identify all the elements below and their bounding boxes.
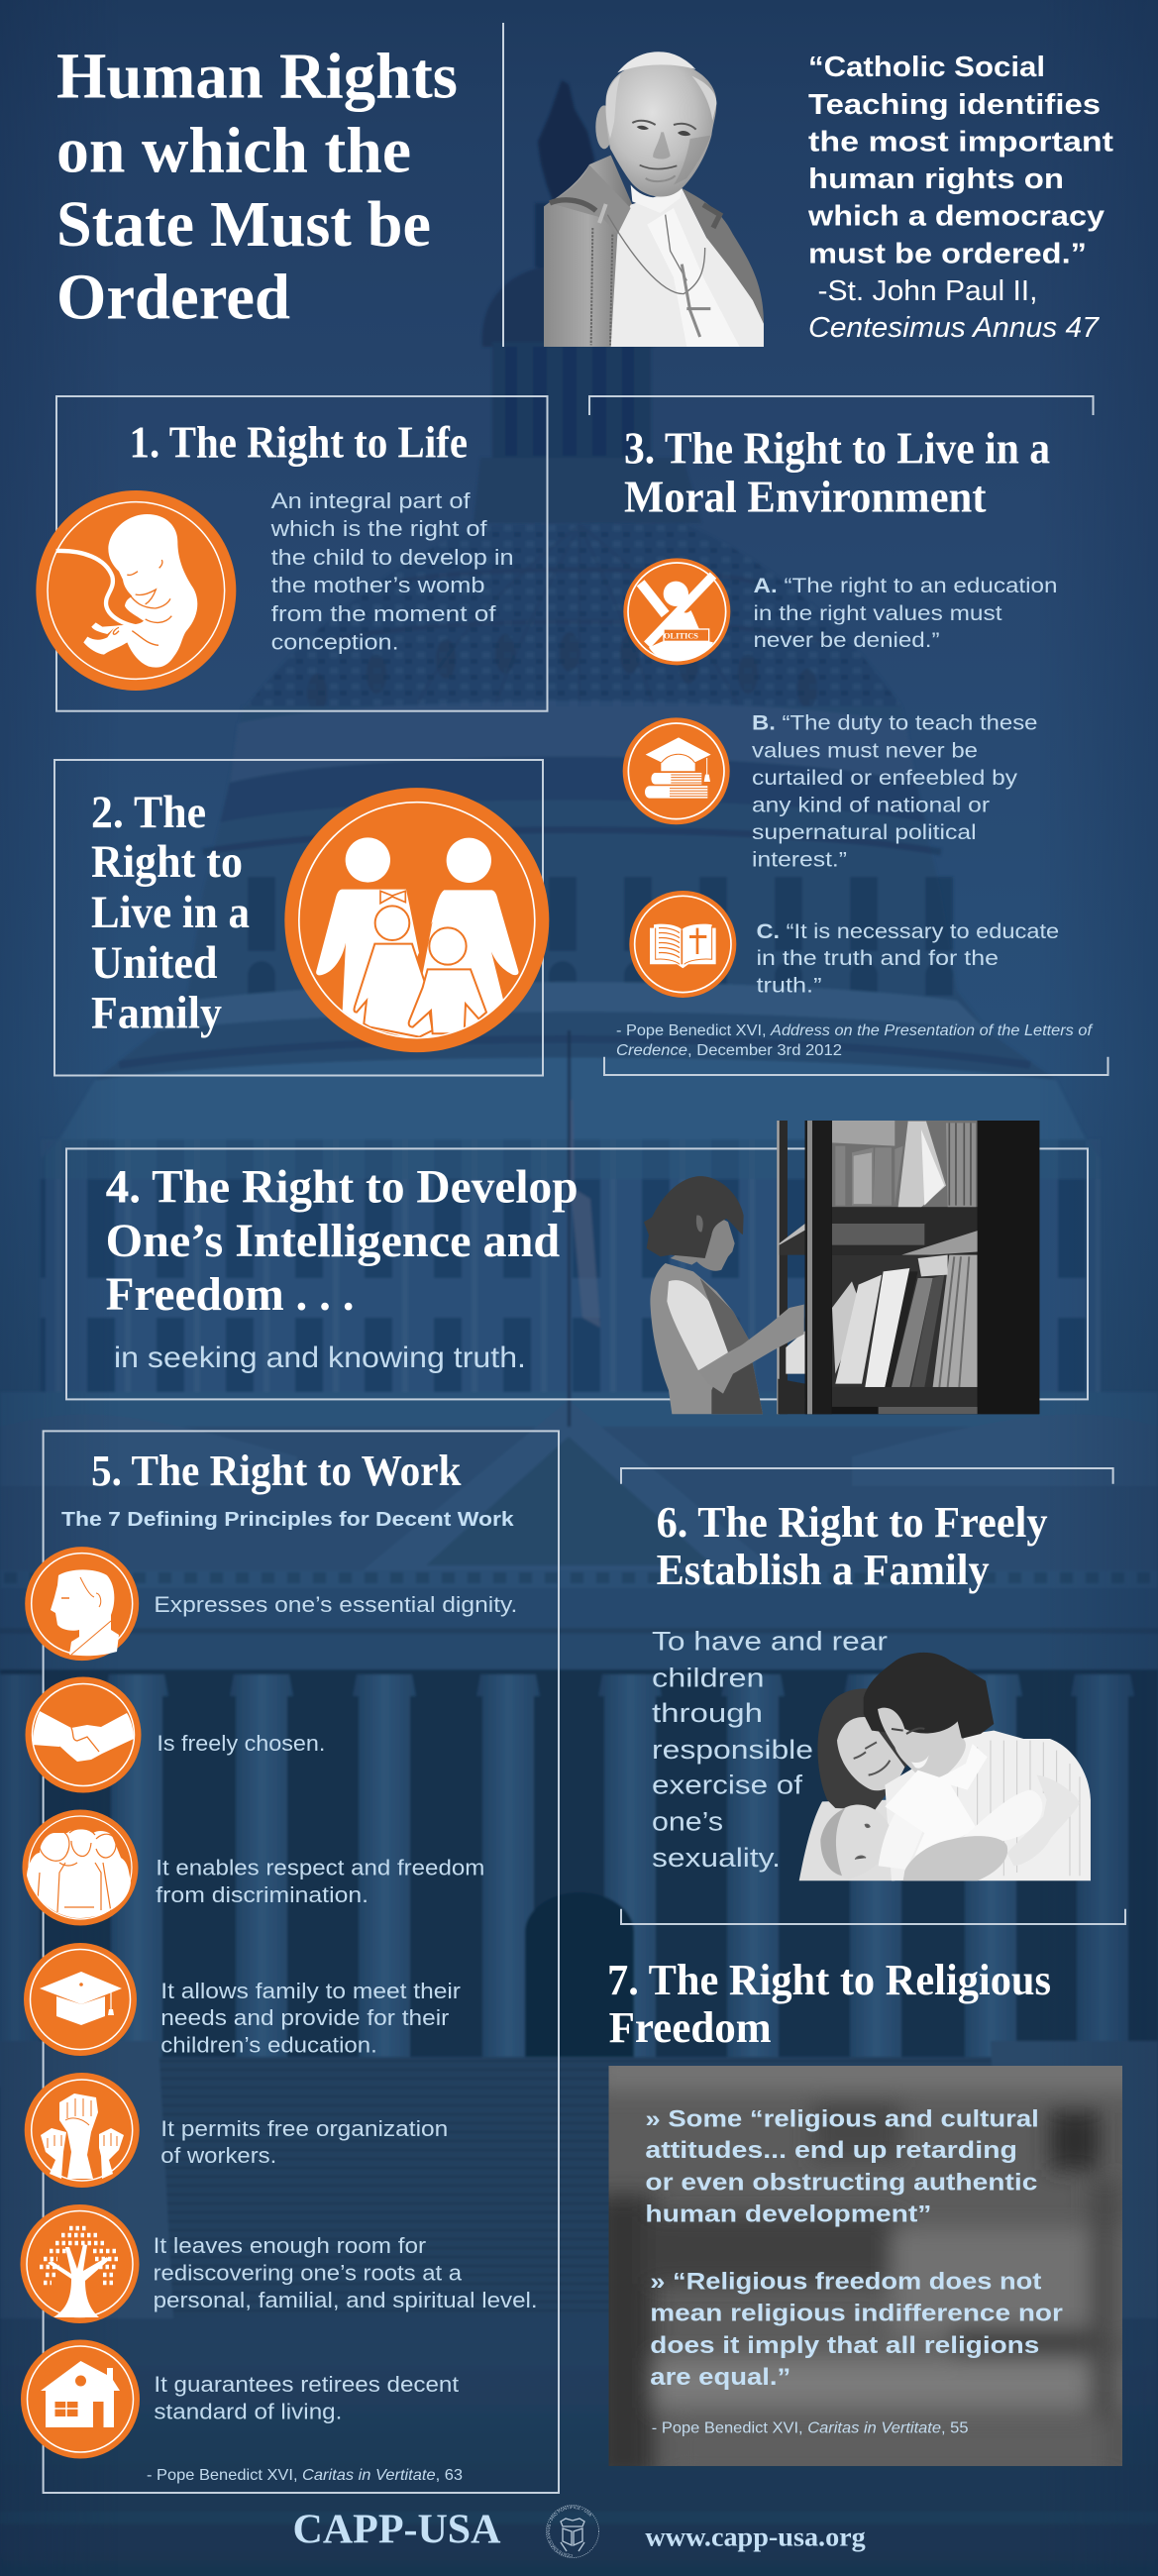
text: point B: curtailed or enfeebled by <box>752 766 1017 790</box>
text: point B: supernatural political <box>752 820 977 844</box>
heading: develop intelligence: One’s Intelligence and <box>106 1215 561 1267</box>
text: rear children: To have and rear <box>652 1627 888 1657</box>
text: right to life: from the moment of <box>271 601 497 626</box>
text: right to life: the mother’s womb <box>271 573 485 597</box>
text: point A: A. “The right to an education <box>753 574 1058 597</box>
quote: religious freedom: mean religious indifference nor <box>650 2301 1063 2326</box>
photo: St. John Paul II <box>544 52 764 347</box>
text: rear children: responsible <box>652 1735 813 1765</box>
icon: open Bible <box>629 891 736 998</box>
text: right to life: the child to develop in <box>271 545 514 570</box>
quote: St. John Paul II: human rights on <box>808 163 1064 195</box>
text: principle 6: rediscovering one’s roots at a <box>154 2261 463 2286</box>
heading: united family: Right to <box>91 836 243 888</box>
heading: moral environment <box>624 422 1050 521</box>
icon: raised fists <box>25 2073 140 2188</box>
text: rear children: one’s <box>652 1807 723 1837</box>
icon: no politics: OLITICS <box>664 632 698 641</box>
quote: religious freedom: does it imply that all religions <box>650 2332 1039 2359</box>
icon: tree <box>20 2204 139 2323</box>
icon: no politics <box>623 558 730 665</box>
text: principle 2: Is freely chosen. <box>157 1731 325 1756</box>
text: principle 6: It leaves enough room for <box>154 2233 426 2258</box>
quote: St. John Paul II: Teaching identifies <box>808 89 1101 121</box>
heading: religious freedom: Freedom <box>609 2003 772 2052</box>
footer: CAPP-USA: CAPP-USA <box>293 2508 501 2553</box>
footer: website: www.capp-usa.org <box>645 2522 866 2552</box>
text: principle 4: children’s education. <box>160 2033 377 2058</box>
heading: united family: 2. The <box>91 787 206 838</box>
quote: St. John Paul II: -St. John Paul II, <box>818 275 1038 307</box>
text: point B <box>752 711 1038 872</box>
icon: diverse people <box>22 1809 139 1926</box>
heading: united family <box>91 787 250 1039</box>
heading: united family: Family <box>91 988 222 1039</box>
text: right to life: conception. <box>271 630 399 655</box>
icon: unborn child <box>36 490 236 691</box>
text: point B: any kind of national or <box>752 794 990 817</box>
text: principle 7: standard of living. <box>154 2400 342 2423</box>
text: point C: in the truth and for the <box>757 946 999 970</box>
heading: moral environment: 3. The Right to Live in a <box>624 422 1050 473</box>
text: principle 7: It guarantees retirees decent <box>154 2372 459 2397</box>
quote: cultural attitudes <box>645 2106 1039 2227</box>
quote: St. John Paul II: Centesimus Annus 47 <box>808 312 1101 344</box>
text: principle 3: It enables respect and freedom <box>156 1856 484 1880</box>
icon: seal: CENTESIMUS ANNUS • PRO PONTIFICE • USA <box>547 2506 591 2557</box>
quote: St. John Paul II: must be ordered.” <box>808 238 1087 269</box>
citation: Benedict XVI <box>616 1022 1094 1059</box>
text: point B: values must never be <box>752 739 978 763</box>
icon: books and cap <box>623 717 730 824</box>
citation: Benedict XVI: Credence , December 3rd 2012 <box>616 1042 842 1059</box>
heading: establish a family: Establish a Family <box>657 1546 990 1594</box>
text: point A <box>753 574 1058 652</box>
heading: develop intelligence <box>106 1161 579 1321</box>
heading: develop intelligence: 4. The Right to Develop <box>106 1161 579 1214</box>
text: rear children: children <box>652 1664 765 1693</box>
photo: girl at bookshelf <box>644 1121 1039 1414</box>
icon: family <box>284 788 549 1052</box>
text: principle 6 <box>154 2233 538 2312</box>
text: point C: C. “It is necessary to educate <box>757 919 1059 943</box>
text: principle 4 <box>160 1979 461 2058</box>
blurred photo panel <box>608 2066 1122 2466</box>
text: principle 5 <box>160 2116 448 2168</box>
quote: cultural attitudes: human development” <box>645 2201 931 2227</box>
panel: right to a united family <box>54 760 549 1076</box>
heading: right to life: 1. The Right to Life <box>129 418 468 468</box>
text: principle 7 <box>154 2372 459 2423</box>
text: principle 3: from discrimination. <box>156 1882 368 1907</box>
text: point B: B. “The duty to teach these <box>752 711 1038 735</box>
panel: right to live in a moral environment <box>589 396 1107 1075</box>
title: Human Rights <box>56 41 458 113</box>
text: point A: never be denied.” <box>753 628 939 652</box>
title: State Must be <box>56 188 431 261</box>
text: principle 6: personal, familial, and spiritual level. <box>154 2288 538 2312</box>
title: Ordered <box>56 261 290 333</box>
citation: Caritas 63: - Pope Benedict XVI, Caritas in Vertitate, 63 <box>147 2467 463 2484</box>
heading: united family: United <box>91 937 218 989</box>
text: seeking truth: in seeking and knowing truth. <box>114 1342 526 1374</box>
panel: right to life <box>36 396 547 711</box>
text: right to life: which is the right of <box>269 516 488 541</box>
text: right to life <box>269 488 514 655</box>
title: on which the <box>56 115 411 186</box>
text: rear children: through <box>652 1698 763 1728</box>
text: principle 5: It permits free organization <box>160 2116 448 2141</box>
quote: St. John Paul II: “Catholic Social <box>808 52 1045 83</box>
quote: religious freedom: » “Religious freedom does not <box>650 2269 1041 2296</box>
text: principle 4: It allows family to meet their <box>160 1979 461 2003</box>
text: right to life: An integral part of <box>271 488 472 513</box>
subheading: defining principles: The 7 Defining Principles for Decent Work <box>61 1509 515 1531</box>
citation: Caritas 55: - Pope Benedict XVI, Caritas in Vertitate, 55 <box>652 2420 969 2437</box>
text: point A: in the right values must <box>753 601 1002 625</box>
heading: develop intelligence: Freedom . . . <box>106 1268 355 1321</box>
panel: right to work <box>20 1431 559 2493</box>
quote: St. John Paul II: the most important <box>808 127 1113 159</box>
panel: right to develop intelligence <box>66 1121 1088 1414</box>
heading: religious freedom <box>607 1956 1051 2052</box>
heading: establish a family <box>657 1498 1048 1594</box>
photo: family with baby <box>799 1653 1091 1880</box>
icon: handshake <box>26 1676 141 1793</box>
icon: graduation cap <box>24 1943 137 2056</box>
quote: religious freedom: are equal.” <box>650 2364 790 2391</box>
heading: religious freedom: 7. The Right to Religious <box>607 1956 1051 2004</box>
text: point C: truth.” <box>757 973 822 997</box>
heading: right to work: 5. The Right to Work <box>91 1447 462 1495</box>
citation: Benedict XVI: - Pope Benedict XVI, Address on the Presentation of the Letters of <box>616 1022 1094 1039</box>
icon: man in profile <box>25 1547 139 1661</box>
text: principle 4: needs and provide for their <box>160 2005 449 2030</box>
quote: religious freedom <box>650 2269 1063 2391</box>
quote: cultural attitudes: or even obstructing authentic <box>645 2170 1037 2197</box>
quote: St. John Paul II <box>807 52 1113 344</box>
text: principle 3 <box>156 1856 484 1907</box>
text: rear children <box>652 1627 888 1873</box>
quote: cultural attitudes: » Some “religious and cultural <box>645 2106 1039 2132</box>
panel: right to freely establish a family <box>621 1468 1125 1924</box>
quote: cultural attitudes: attitudes... end up retarding <box>645 2137 1017 2164</box>
text: point B: interest.” <box>752 848 847 872</box>
text: rear children: sexuality. <box>652 1843 781 1873</box>
text: point C <box>757 919 1059 997</box>
heading: establish a family: 6. The Right to Freely <box>657 1498 1048 1547</box>
text: principle 1: Expresses one’s essential dignity. <box>154 1592 517 1617</box>
title <box>56 41 458 333</box>
text: principle 5: of workers. <box>160 2143 276 2168</box>
icon: house <box>21 2340 140 2459</box>
panel: right to religious freedom <box>608 1964 1122 2466</box>
quote: St. John Paul II: which a democracy <box>807 201 1105 233</box>
heading: united family: Live in a <box>91 887 250 938</box>
text: rear children: exercise of <box>652 1771 803 1800</box>
heading: moral environment: Moral Environment <box>624 472 987 521</box>
